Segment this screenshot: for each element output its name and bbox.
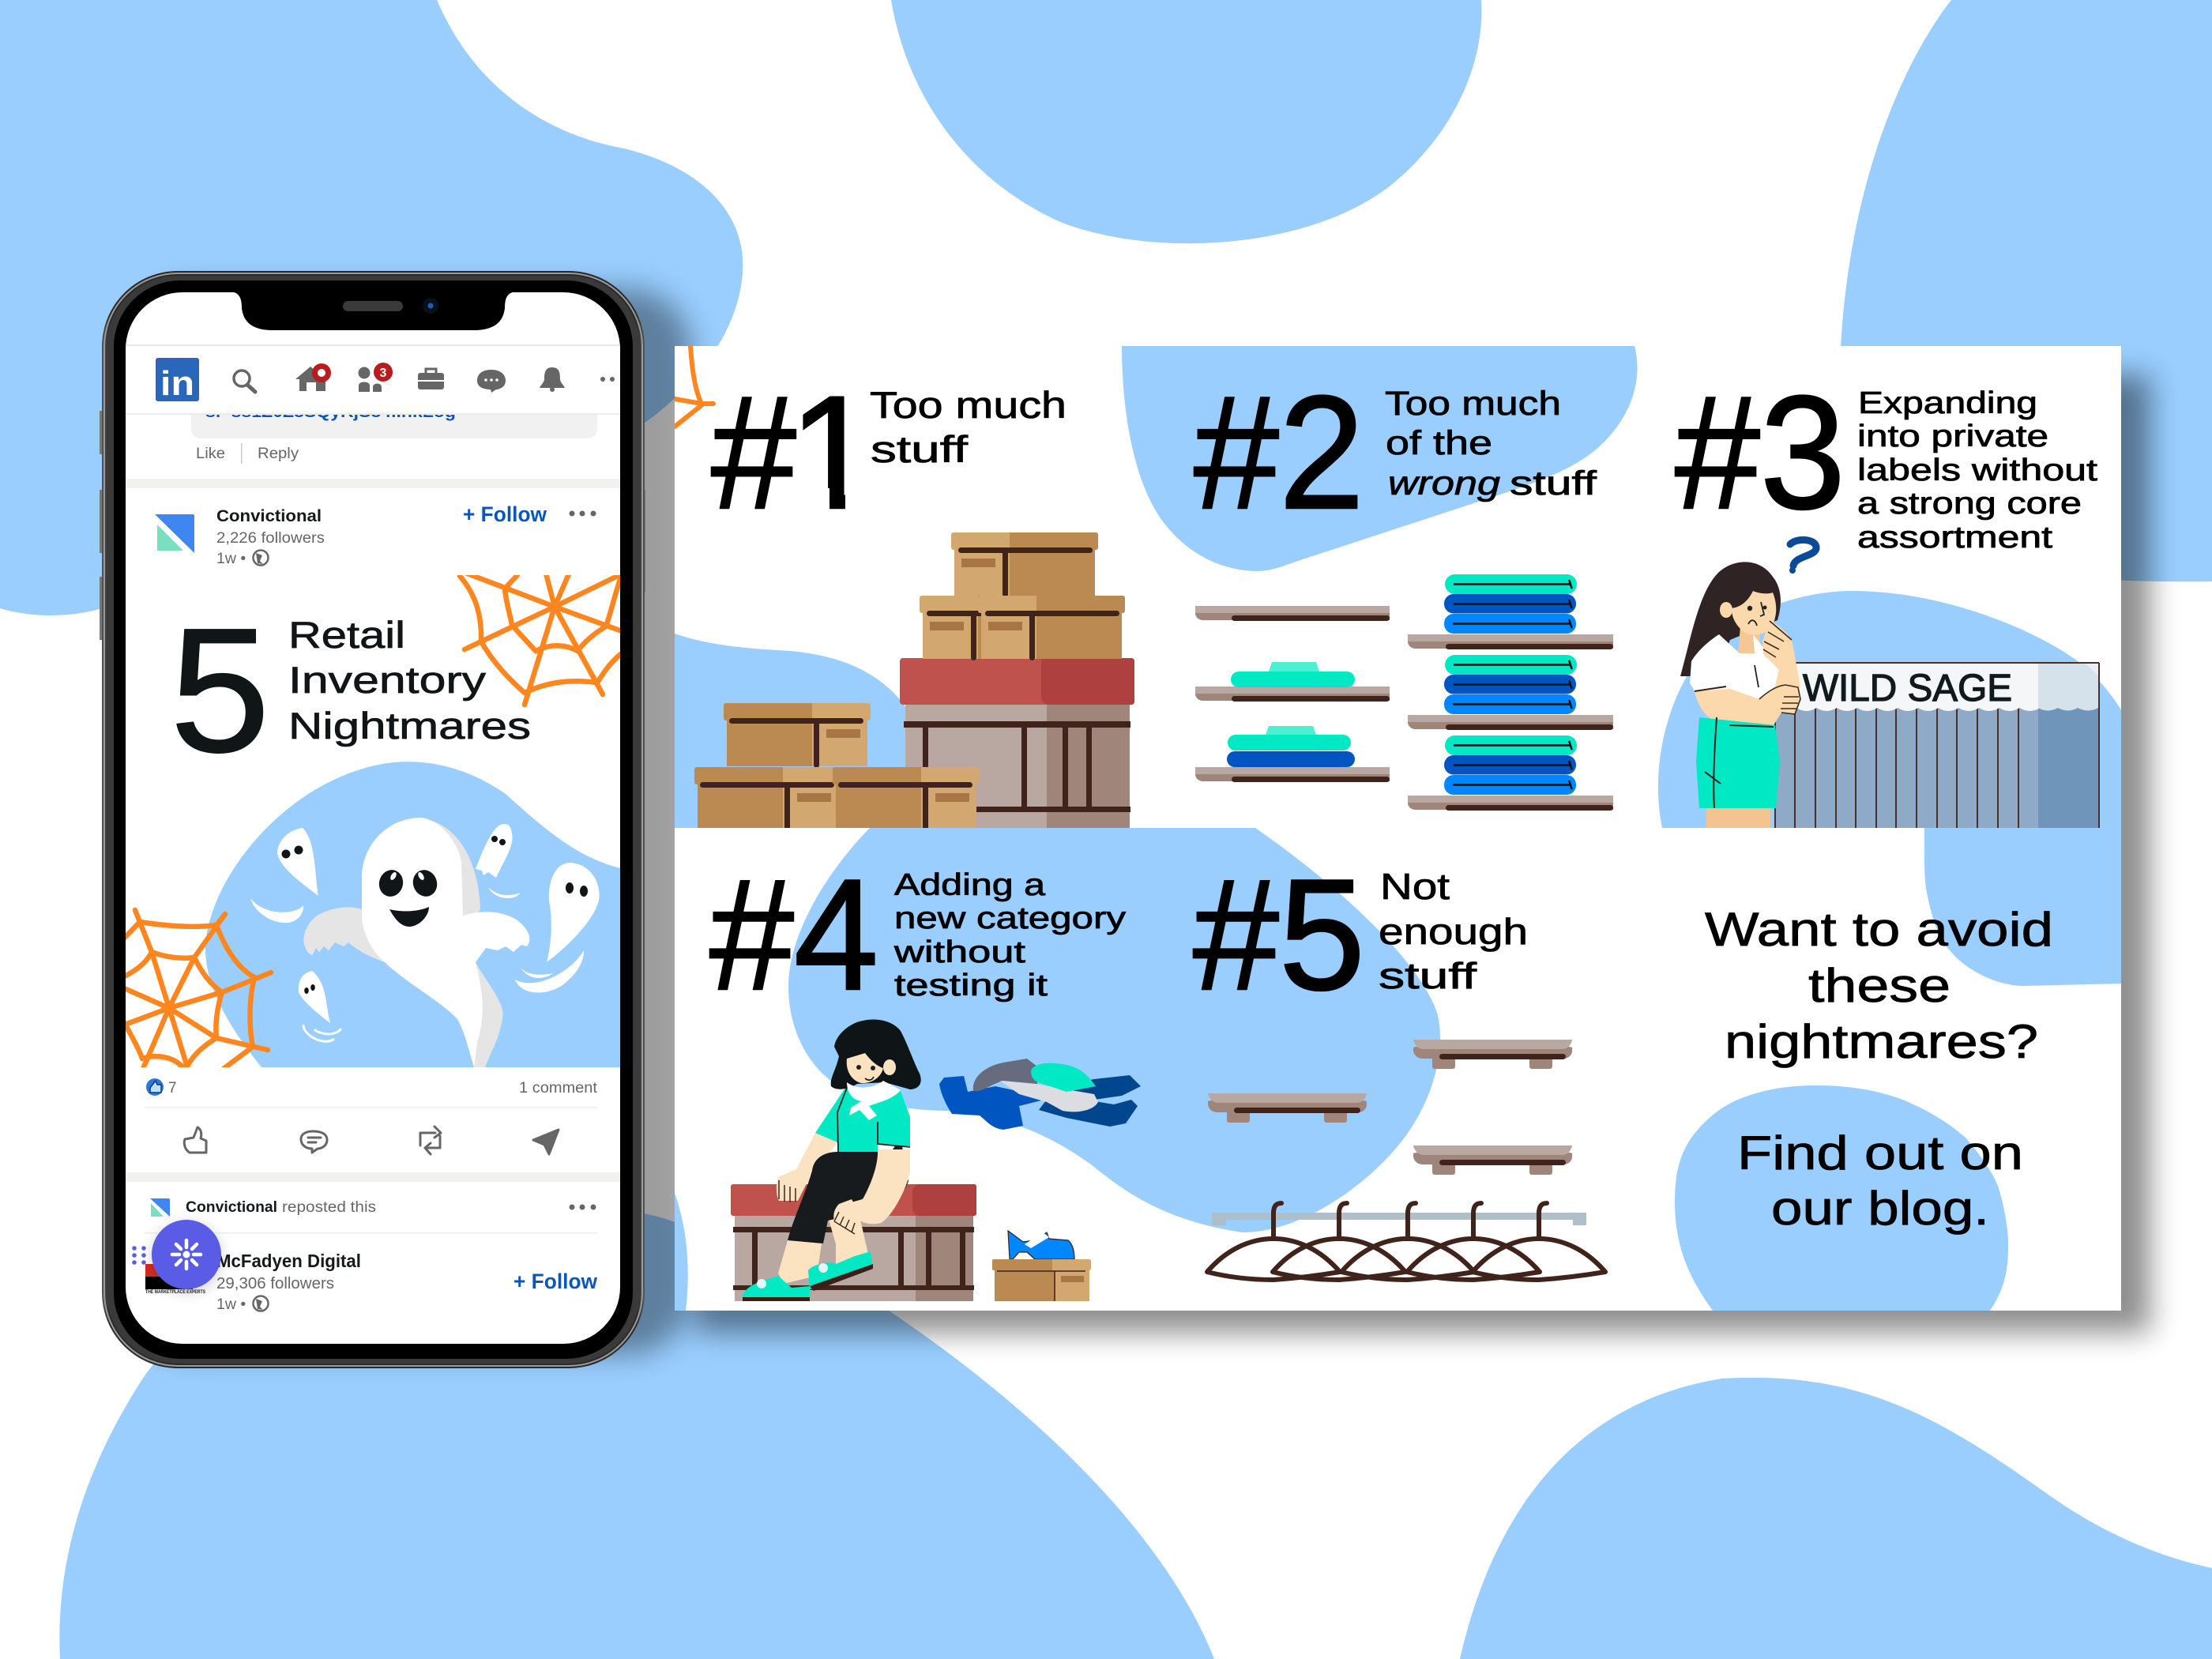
small ghost 4 xyxy=(299,971,341,1041)
divider band xyxy=(126,1172,620,1182)
mcfadyen logo: THE MARKETPLACE EXPERTS xyxy=(145,1289,206,1295)
text: expanding into private labels xyxy=(1857,386,2097,555)
icon: home xyxy=(295,363,331,391)
hangers xyxy=(1207,1203,1605,1280)
screen xyxy=(118,292,624,1344)
text: too much of the wrong stuff: of the xyxy=(1386,424,1492,462)
icon: question mark xyxy=(1789,540,1816,574)
post title: Inventory xyxy=(288,659,487,701)
card background xyxy=(675,346,2121,828)
comment fragment: sl=ss1Z0Z8SQyRjS84linkLog xyxy=(205,403,456,421)
second post header: + Follow xyxy=(514,1270,598,1293)
icon: thumb up xyxy=(184,1127,206,1153)
repost row: reposted this xyxy=(282,1199,376,1216)
text: adding a new category: testing it xyxy=(894,969,1048,1003)
phone shadow xyxy=(134,288,691,1355)
text: too much stuff: Too much xyxy=(870,384,1066,426)
spider web: top right xyxy=(459,570,624,705)
mcfadyen logo xyxy=(145,1264,206,1295)
clothes rail xyxy=(1212,1213,1586,1225)
text: adding a new category: new category xyxy=(894,901,1127,935)
icon: globe xyxy=(253,550,269,566)
like reply: Like xyxy=(196,446,225,462)
repost row xyxy=(145,1198,597,1234)
floor boxes xyxy=(694,703,980,832)
text: adding a new category: Adding a xyxy=(894,868,1045,902)
storefront: wild sage xyxy=(1775,663,2099,828)
text: too much of the wrong stuff xyxy=(1385,385,1597,502)
row 2 background xyxy=(675,828,2121,1311)
like reply: Reply xyxy=(258,446,299,462)
ghost illustration xyxy=(205,762,620,1067)
woman sitting xyxy=(743,1020,921,1301)
like reply xyxy=(196,443,299,464)
phone body xyxy=(102,271,645,1368)
reactions row: 1 comment xyxy=(519,1080,598,1097)
text: expanding into private labels: Expanding xyxy=(1858,386,2037,420)
blob: top centre xyxy=(891,0,1481,243)
second post header: McFadyen Digital xyxy=(216,1251,361,1271)
small ghost 2 xyxy=(476,824,521,898)
infographic card xyxy=(675,346,2122,1311)
question text: Want to avoid xyxy=(1705,903,2053,956)
heading: #5: #5 xyxy=(1193,847,1365,1023)
text: expanding into private labels: labels without xyxy=(1857,453,2097,487)
woman thinking xyxy=(1680,562,1800,832)
post header: 2,226 followers xyxy=(216,529,325,547)
icon: people xyxy=(359,363,393,392)
corner spider web xyxy=(675,346,713,427)
phone xyxy=(100,271,645,1368)
text: adding a new category: without xyxy=(893,935,1025,969)
bench with red cushion xyxy=(900,658,1134,828)
text: too much stuff: stuff xyxy=(871,428,969,470)
question text: nightmares? xyxy=(1725,1015,2038,1068)
small ghost 3 xyxy=(515,863,600,992)
text: not enough stuff xyxy=(1379,866,1528,996)
blog text xyxy=(1737,1127,2023,1235)
second post header xyxy=(145,1251,598,1313)
small ghost 1 xyxy=(250,828,318,923)
post title: Nightmares xyxy=(288,705,531,747)
icon: small logo xyxy=(150,1198,170,1217)
blog text: Find out on xyxy=(1737,1127,2023,1179)
icon: globe xyxy=(253,1296,269,1311)
panel: #1 too much stuff xyxy=(675,346,1134,832)
blob: panels 4 and 5 xyxy=(788,828,1440,1232)
more dots xyxy=(569,510,596,517)
divider band xyxy=(126,479,620,488)
side buttons xyxy=(100,411,645,640)
shelves with brackets xyxy=(1208,1040,1572,1175)
icon: messages xyxy=(477,370,506,393)
panel: call to action xyxy=(1675,828,2121,1311)
stack of boxes xyxy=(920,532,1125,660)
reactions row xyxy=(145,1078,598,1108)
blob: bottom left xyxy=(59,1198,1214,1659)
icon: convictional logo xyxy=(155,514,194,553)
spider web: bottom left xyxy=(118,910,271,1074)
heading: #1 xyxy=(711,397,845,509)
second post header: 1w • xyxy=(216,1296,246,1313)
nav bar xyxy=(126,346,620,415)
question text: these xyxy=(1808,959,1951,1012)
icon: more dots xyxy=(600,377,615,382)
heading: #3: #3 xyxy=(1675,363,1845,543)
action icons xyxy=(184,1127,559,1154)
heading: #2: #2 xyxy=(1194,363,1364,543)
purple widget xyxy=(132,1220,221,1292)
icon: people: 3 xyxy=(380,367,387,380)
post header xyxy=(155,502,596,567)
blob: top left xyxy=(0,0,743,615)
icon: search xyxy=(234,371,255,392)
screen background xyxy=(126,292,620,1344)
heading: #1: 1 xyxy=(788,363,878,543)
post header: 1w • xyxy=(216,550,246,567)
post header: Convictional xyxy=(216,507,322,525)
text: expanding into private labels: into private xyxy=(1857,419,2048,453)
text: expanding into private labels: a strong core xyxy=(1857,487,2082,521)
icon: like badge xyxy=(146,1078,164,1096)
icon: briefcase xyxy=(418,369,444,389)
text: expanding into private labels: assortment xyxy=(1857,521,2052,555)
blob: bottom xyxy=(1675,1085,2008,1311)
card shadow xyxy=(695,375,2150,1333)
post header: + Follow xyxy=(463,502,547,526)
text: adding a new category xyxy=(893,868,1127,1003)
reactions row: 7 xyxy=(168,1080,177,1097)
post title xyxy=(170,592,531,789)
panel: #2 wrong stuff xyxy=(1122,346,1638,811)
repost row: Convictional xyxy=(186,1199,277,1216)
icon: comment xyxy=(301,1131,327,1153)
sign text: WILD SAGE xyxy=(1803,668,2012,709)
icon: linkedin: in xyxy=(160,364,194,403)
nearly empty shelves xyxy=(1195,606,1390,782)
top bar line xyxy=(126,344,620,346)
blob: card bottom left sliver xyxy=(675,1193,688,1311)
post title: Retail xyxy=(288,614,405,656)
text: too much stuff xyxy=(871,390,1064,463)
panel: #5 not enough stuff xyxy=(1193,847,1605,1280)
panel: #3 private labels xyxy=(1658,363,2122,832)
notch xyxy=(234,292,513,330)
text: not enough stuff: stuff xyxy=(1379,955,1477,996)
main ghost xyxy=(303,818,529,1067)
icon: bell xyxy=(540,367,565,392)
text: too much of the wrong stuff: Too much xyxy=(1385,385,1561,423)
comment fragment xyxy=(191,395,597,438)
blob: panel 2 xyxy=(1122,346,1638,571)
second post header: 29,306 followers xyxy=(216,1275,334,1292)
blob: panel 1 xyxy=(675,634,908,828)
post title: 5 xyxy=(170,592,270,789)
heading: #4: #4 xyxy=(709,847,878,1023)
fully stocked shelves xyxy=(1408,574,1613,811)
icon: linkedin xyxy=(156,358,199,403)
bench xyxy=(731,1184,976,1301)
blob: bottom right xyxy=(1460,1378,2212,1659)
blob: top right xyxy=(1841,0,2212,581)
heading: #1: # xyxy=(711,363,796,543)
icon: send xyxy=(533,1130,559,1154)
panel: #4 new category xyxy=(709,847,1141,1301)
shoe box xyxy=(992,1231,1091,1301)
blob: panel 3 xyxy=(1658,591,2122,828)
blog text: our blog. xyxy=(1771,1182,1989,1235)
text: too much of the wrong stuff: wrong xyxy=(1388,465,1500,502)
text: too much of the wrong stuff: stuff xyxy=(1510,465,1597,502)
question text xyxy=(1705,903,2053,1068)
text: not enough stuff: enough xyxy=(1379,911,1528,952)
text: not enough stuff: Not xyxy=(1380,866,1450,907)
icon: repost xyxy=(420,1127,441,1154)
blob: top right xyxy=(1924,828,2121,986)
blob behind ghosts xyxy=(205,762,620,1067)
pile of clothes xyxy=(939,1059,1141,1130)
